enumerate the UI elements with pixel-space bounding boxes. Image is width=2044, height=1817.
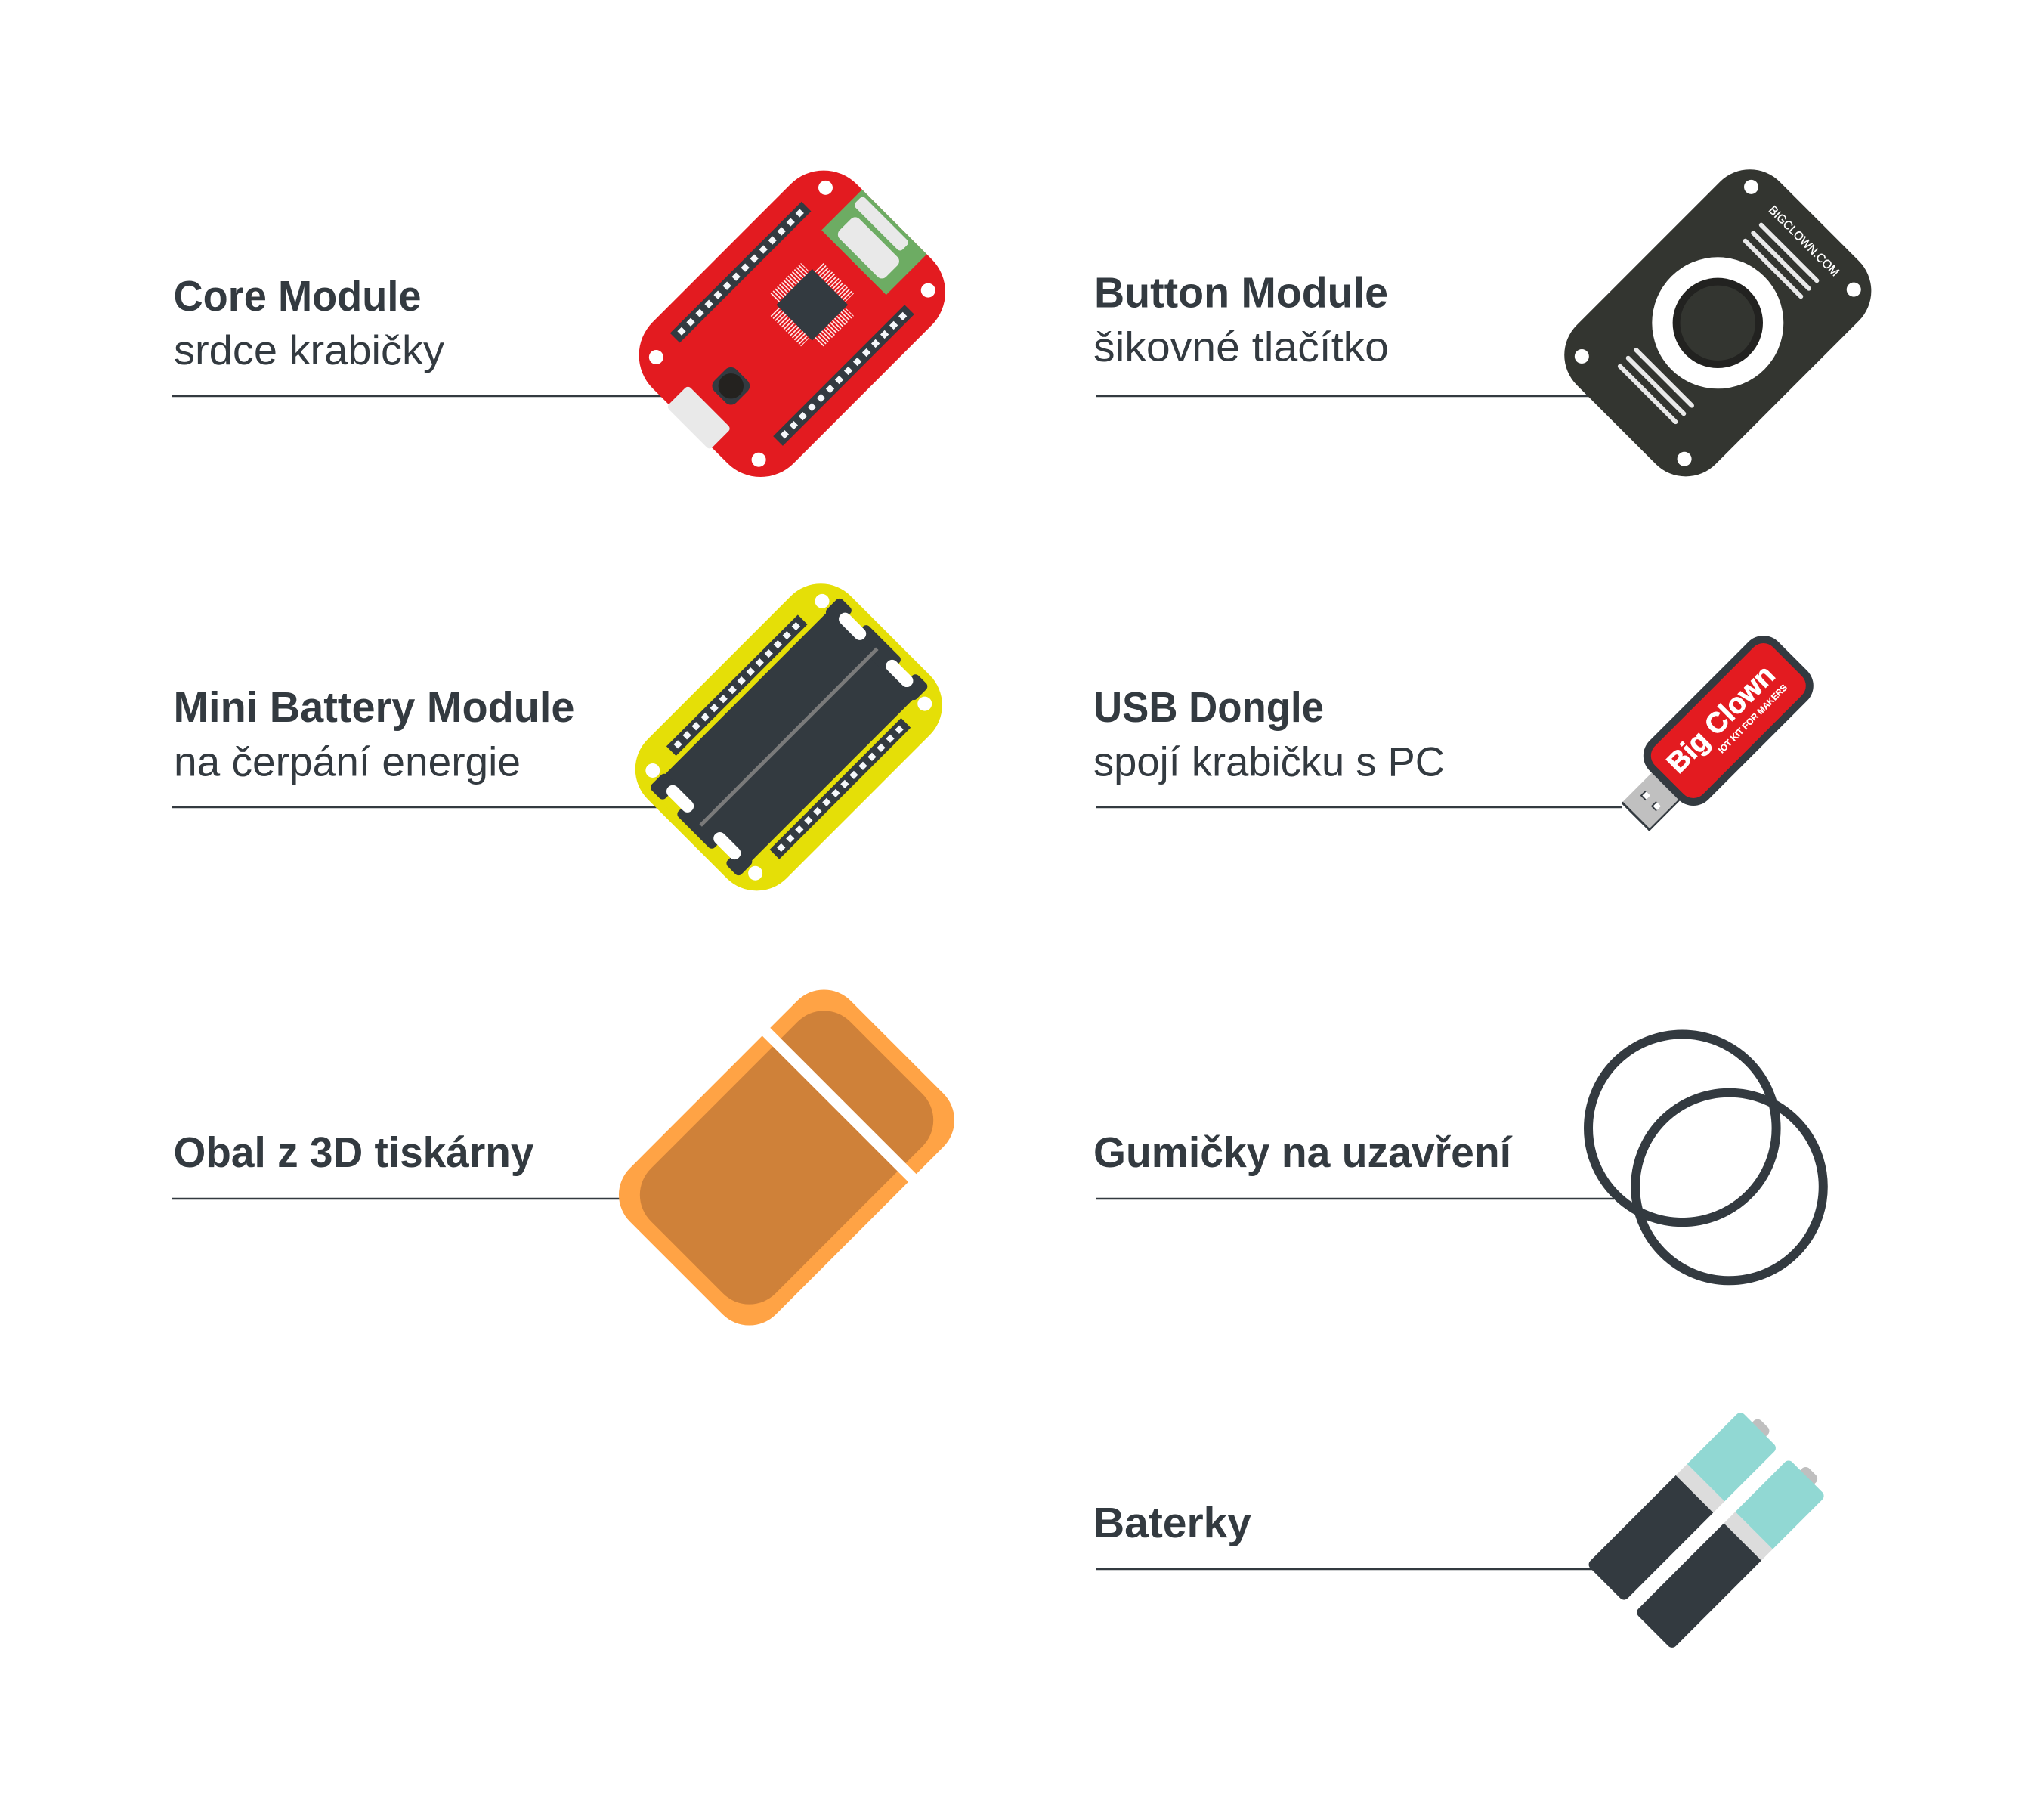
- icon: USB dongle: IOT KIT FOR MAKERS: [1716, 683, 1789, 755]
- text: spojí krabičku s PC: spojí krabičku s PC: [1093, 738, 1445, 785]
- icon: battery 1: [1587, 1405, 1783, 1602]
- heading: Gumičky na uzavření: Gumičky na uzavření: [1093, 1128, 1513, 1177]
- text: šikovné tlačítko: šikovné tlačítko: [1093, 323, 1389, 370]
- icon: battery 2: [1634, 1453, 1832, 1650]
- heading: USB Dongle: USB Dongle: [1093, 683, 1324, 732]
- icon: Mini Battery Module board: [618, 566, 960, 908]
- icon: Button Module board: BIGCLOWN.COM: [1766, 204, 1841, 279]
- icon: USB dongle: [1604, 627, 1822, 845]
- heading: Core Module: Core Module: [174, 272, 422, 320]
- icon: USB dongle: Big Clown: [1661, 659, 1781, 779]
- heading: Obal z 3D tiskárny: Obal z 3D tiskárny: [174, 1128, 534, 1177]
- heading: Baterky: Baterky: [1093, 1499, 1251, 1547]
- heading: Button Module: Button Module: [1094, 269, 1388, 317]
- icon: 3D printed case: [601, 971, 973, 1344]
- heading: Mini Battery Module: Mini Battery Module: [174, 683, 574, 732]
- icon: Button Module board: [1547, 152, 1889, 494]
- icon: rubber bands: [1588, 1034, 1823, 1280]
- icon: Core Module board: [617, 151, 965, 499]
- text: na čerpání energie: na čerpání energie: [174, 738, 521, 785]
- text: srdce krabičky: srdce krabičky: [174, 327, 445, 373]
